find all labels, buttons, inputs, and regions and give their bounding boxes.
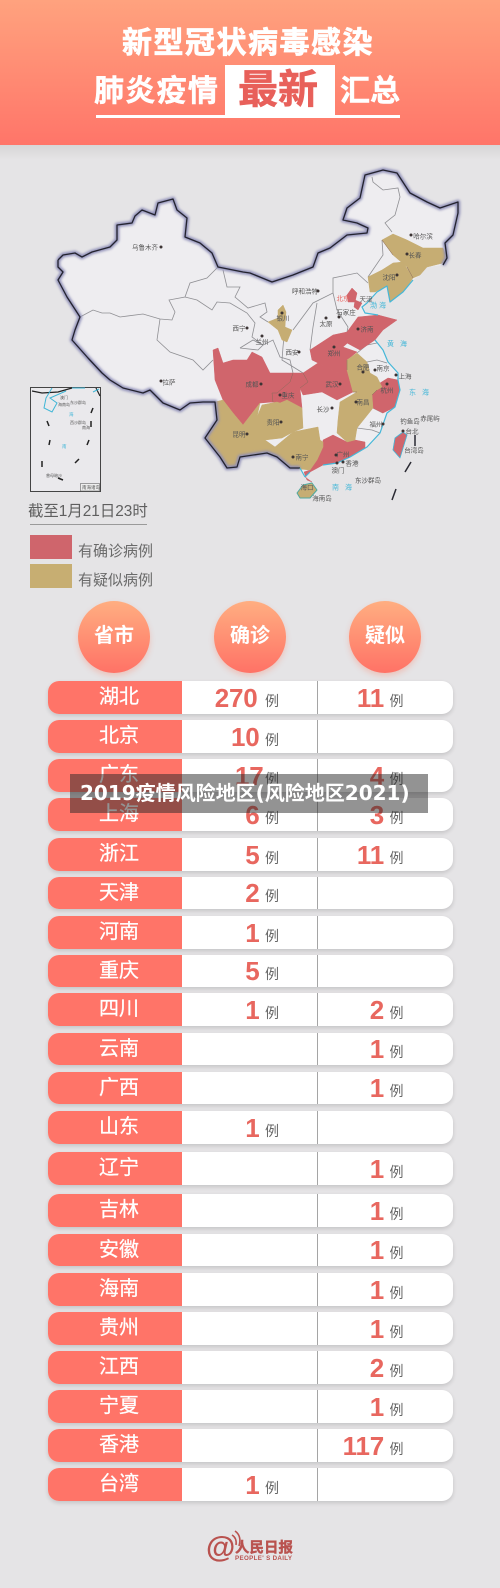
logo subtitle: PEOPLE' S DAILY [235,1555,293,1562]
city labels: 拉萨 [162,378,176,386]
row: Shandong: 1 [245,1112,260,1142]
row: Jiangxi [48,1351,453,1384]
city labels: 南宁 [296,452,309,462]
row: Anhui: 例 [390,1245,404,1261]
sea labels: 黄 海 [387,339,409,348]
city labels: 西宁 [232,324,246,332]
city labels: 合肥 [356,362,370,372]
inset map: South China Sea: 曾母暗沙 [46,472,62,478]
row: Zhejiang: 浙江 [99,843,139,865]
city labels: 长沙 [316,404,330,414]
row: Shanghai: 6 [245,800,260,830]
city labels: 太原 [320,319,333,328]
column header: confirmed: 确诊 [230,625,270,647]
row: Hubei: 11 [357,682,384,712]
title underline [96,115,400,118]
row: Liaoning: 例 [390,1164,404,1180]
inset map: South China Sea: 澳门 [60,394,68,400]
swatch: suspected [30,564,72,588]
land border with shadow [58,170,458,468]
inset map: South China Sea: 南海诸岛 [82,484,100,491]
row: Yunnan [48,1033,453,1065]
city labels: 南昌 [356,398,370,406]
row: Liaoning: 1 [370,1154,384,1184]
row: Yunnan: 例 [390,1044,404,1060]
legend text: confirmed: 有确诊病例 [78,543,153,560]
row: Hainan [48,1273,453,1306]
provinces with confirmed cases [213,288,407,482]
city labels: 香港 [346,458,359,468]
row: Shanghai: 3 [370,800,384,830]
city labels: 兰州 [256,337,268,346]
inset map: South China Sea: 南 [62,443,67,449]
city labels: 天津 [360,296,373,304]
row: Hubei [48,681,453,714]
row: Guizhou: 1 [370,1314,384,1344]
city labels: 东沙群岛 [355,476,381,484]
city labels: 郑州 [328,350,340,358]
city labels: 呼和浩特 [292,286,318,296]
row: Shanghai: 例 [265,810,279,826]
row: Taiwan: 1 [245,1470,260,1500]
row: Jilin: 1 [370,1196,384,1226]
city labels: 哈尔滨 [413,232,433,240]
inset map: South China Sea [30,388,100,492]
city labels: 重庆 [282,390,295,400]
highlight word: 最新 [238,68,318,112]
city labels: 沈阳 [382,272,396,282]
city labels: 南京 [376,364,390,372]
legend [28,503,153,589]
row: Guangdong [48,759,453,792]
row: Chongqing: 例 [265,966,279,982]
row: Zhejiang: 例 [390,850,404,866]
sea labels: 渤 海 [370,300,386,310]
row: Sichuan: 例 [390,1005,404,1021]
map of China [30,166,462,502]
city labels: 广州 [336,450,350,458]
city labels: 昆明 [232,430,246,438]
coast lines [300,280,413,477]
city labels: 北京 [336,294,350,302]
city labels: 成都 [246,380,259,388]
sea labels: 南 海 [332,482,354,492]
provinces with suspected cases [205,234,447,498]
city labels: 银川 [276,314,290,322]
nine-dash segments [392,435,415,500]
row: Hainan: 例 [390,1284,404,1300]
row: Chongqing [48,955,453,987]
row: Sichuan: 2 [370,995,384,1025]
city labels: 武汉 [326,380,339,388]
inset map: South China Sea: 南海 [82,424,90,430]
row: Tianjin [48,877,453,909]
sea labels: 东 海 [409,388,431,396]
row: Henan: 1 [245,918,260,948]
row: Shanghai: 例 [390,810,404,826]
row: Liaoning: 辽宁 [99,1157,139,1179]
row: Hubei: 270 [215,682,258,712]
city dots [160,234,412,464]
province borders [80,177,400,433]
title line 1: 新型冠状病毒感染 [122,27,374,60]
row: Sichuan: 1 [245,995,260,1025]
legend date: 截至1月21日23时 [28,503,148,520]
city labels: 贵阳 [266,418,280,426]
row: Zhejiang: 例 [265,850,279,866]
row: Guangxi: 1 [370,1073,384,1103]
row: Yunnan: 1 [370,1034,384,1064]
row: Shandong: 例 [265,1122,279,1138]
row: Ningxia: 1 [370,1392,384,1422]
city labels: 海南岛 [312,494,332,502]
row: Zhejiang [48,838,453,870]
row: Jiangxi: 江西 [99,1356,139,1378]
row: Sichuan: 例 [265,1005,279,1021]
row: Zhejiang: 11 [357,840,384,870]
row: Taiwan [48,1468,453,1501]
row: Tianjin: 天津 [99,882,139,904]
row: Henan [48,916,453,948]
column header: suspected [349,601,421,673]
row: Hainan: 1 [370,1274,384,1304]
logo wordmark: 人民日报 [235,1538,293,1556]
row: Shandong [48,1111,453,1144]
city labels: 钓鱼岛 [400,416,420,426]
row: Hainan: 海南 [99,1278,139,1300]
row: Taiwan: 例 [265,1480,279,1496]
city labels: 上海 [398,372,412,380]
row: Ningxia [48,1390,453,1423]
row: Jiangxi: 2 [370,1352,384,1382]
row: Jilin: 例 [390,1206,404,1222]
row: Shanghai [48,798,453,831]
row: Tianjin: 2 [245,878,260,908]
row: Taiwan: 台湾 [99,1473,139,1495]
city labels: 海口 [300,482,314,492]
row: Anhui: 1 [370,1235,384,1265]
city labels: 台湾岛 [404,446,424,454]
row: Guangdong: 4 [370,761,384,791]
row: Chongqing: 5 [245,956,260,986]
city labels: 石家庄 [336,308,356,316]
header banner [0,0,500,152]
legend text: suspected: 有疑似病例 [78,572,153,589]
row: Guizhou [48,1312,453,1344]
row: Beijing: 北京 [99,725,139,747]
row: Ningxia: 例 [390,1402,404,1418]
overlay caption banner [70,774,428,813]
row: Chongqing: 重庆 [99,960,139,982]
row: Ningxia: 宁夏 [99,1395,139,1417]
row: Sichuan [48,993,453,1026]
city labels: 赤尾屿 [420,414,440,422]
city labels: 乌鲁木齐 [132,242,158,252]
swatch: confirmed [30,535,72,559]
sea labels [332,300,431,492]
row: Yunnan: 云南 [99,1038,139,1060]
column header: suspected: 疑似 [365,625,405,647]
city labels: 台北 [406,426,419,436]
row: Zhejiang: 5 [245,840,260,870]
highlight box [225,65,335,118]
inset map: South China Sea: 海南岛 [58,401,70,407]
row: Hubei: 例 [390,692,404,708]
column header: province: 省市 [94,625,134,647]
city labels: 西安 [286,348,299,356]
row: Shanghai: 上海 [99,803,139,825]
logo at sign: @ [206,1531,235,1564]
data table [46,681,454,1504]
city labels: 济南 [360,324,374,334]
title line 2 left: 肺炎疫情 [94,75,219,108]
row: Jilin: 吉林 [99,1199,139,1221]
row: Beijing [48,720,453,753]
row: Hong Kong: 117 [343,1431,384,1461]
city labels: 福州 [370,420,382,428]
row: Guizhou: 例 [390,1324,404,1340]
row: Tianjin: 例 [265,888,279,904]
row: Guangxi: 例 [390,1083,404,1099]
row: Hubei: 湖北 [99,686,139,708]
row: Guangxi: 广西 [99,1077,139,1099]
row: Guangdong: 例 [265,771,279,787]
row: Guangdong: 17 [235,761,264,791]
row: Hong Kong: 香港 [99,1434,139,1456]
row: Shandong: 山东 [99,1116,139,1138]
inset map: South China Sea: 海 [69,411,74,418]
inner borders on coloured provinces [272,240,413,402]
row: Hubei: 例 [265,692,279,708]
inset map: South China Sea: 东沙群岛 [70,399,86,405]
row: Guangxi [48,1072,453,1104]
column header: province [78,601,150,673]
city labels: 杭州 [380,386,394,394]
row: Beijing: 例 [265,732,279,748]
row: Sichuan: 四川 [99,998,139,1020]
row: Liaoning [48,1152,453,1184]
row: Beijing: 10 [231,722,260,752]
logo signal arcs [232,1531,240,1546]
row: Henan: 河南 [99,921,139,943]
land [58,170,458,477]
row: Guizhou: 贵州 [99,1317,139,1339]
row: Guangdong: 例 [390,771,404,787]
city labels [132,232,440,502]
row: Jiangxi: 例 [390,1362,404,1378]
city labels: 澳门 [332,466,344,474]
city labels: 长春 [408,250,422,260]
row: Henan: 例 [265,928,279,944]
row: Anhui: 安徽 [99,1239,139,1261]
title line 2 right: 汇总 [340,75,400,108]
row: Guangdong: 广东 [99,764,139,786]
row: Anhui [48,1234,453,1266]
row: Hong Kong [48,1429,453,1462]
logo: People's Daily [206,1530,293,1564]
row: Hong Kong: 例 [390,1441,404,1457]
column header: confirmed [214,601,286,673]
overlay caption text: 2019疫情风险地区(风险地区2021) [80,781,410,805]
inset map: South China Sea: 西沙群岛 [70,419,86,425]
row: Jilin [48,1194,453,1227]
